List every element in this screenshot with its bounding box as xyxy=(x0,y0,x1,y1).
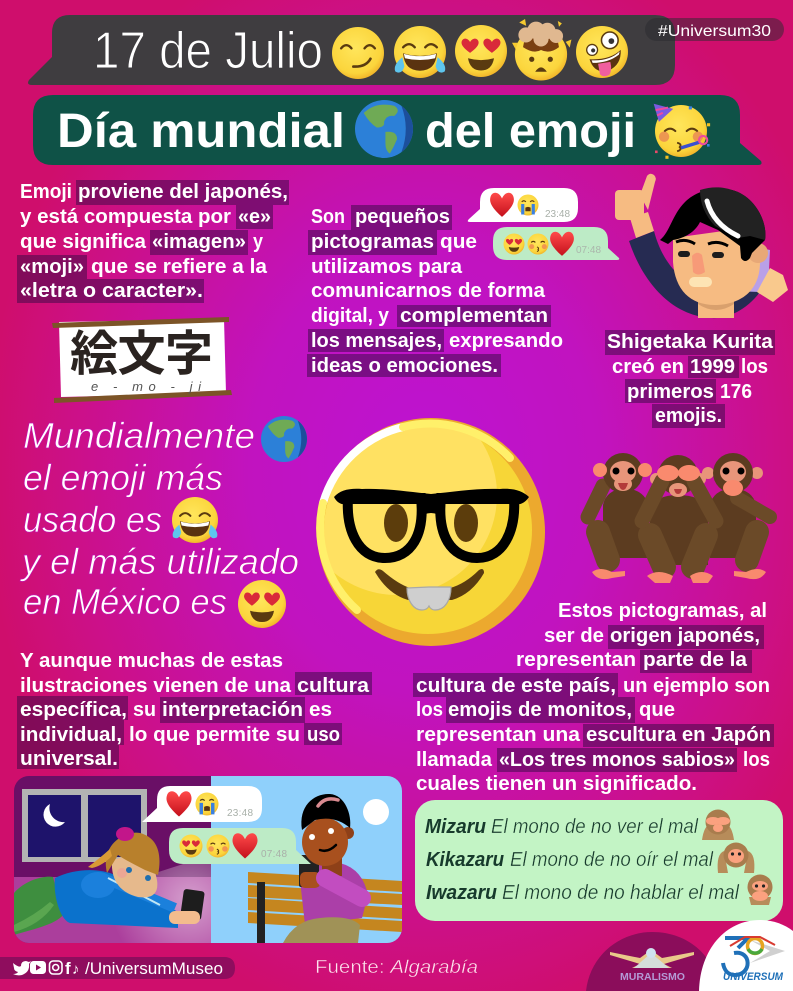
glasses xyxy=(334,489,529,558)
text block: Shigetaka Kurita: Shigetaka Kurita xyxy=(607,330,774,353)
text block: interpretación individual xyxy=(17,649,372,770)
icon: crying emoji xyxy=(518,194,538,216)
timestamp: 23:48 xyxy=(545,209,570,220)
icon: instagram xyxy=(50,961,62,974)
icon: smirking emoji xyxy=(332,27,384,79)
text block: origen japonés: Estos pictogramas, al xyxy=(558,599,767,622)
title bubble: 17 de Julio xyxy=(28,15,675,85)
text block: pictogramas: ideas o emociones. xyxy=(311,354,498,377)
icon: heart eyes emoji xyxy=(455,25,507,77)
text block: origen de la palabra emoji: que se refiere a la xyxy=(91,255,268,278)
kanji sign: 絵文字: e - mo - ji xyxy=(91,379,202,394)
text block: origen japonés: representan una xyxy=(416,723,581,746)
chat bubble: white message xyxy=(468,188,578,222)
left monkey xyxy=(588,453,652,579)
text block: origen de la palabra emoji: proviene del japonés, xyxy=(78,180,288,203)
line: Kikazaru xyxy=(426,842,754,873)
chat bubble: green message xyxy=(493,227,619,260)
social handle: /UniversumMuseo xyxy=(85,959,223,978)
line: Iwazaru: El mono de no hablar el mal xyxy=(502,882,740,904)
day background xyxy=(211,776,402,943)
illustration: Shigetaka Kurita xyxy=(615,174,788,318)
illustration panel: girl and boy chatting xyxy=(14,776,402,943)
icon: youtube xyxy=(30,961,46,974)
icon: laughing emoji xyxy=(172,497,218,543)
text block: interpretación individual: es xyxy=(309,698,332,721)
bench xyxy=(248,872,402,932)
hair xyxy=(660,188,765,261)
text block: interpretación individual: interpretación xyxy=(162,698,303,721)
text block: pictogramas: pictogramas xyxy=(311,230,434,253)
text block: origen japonés: un ejemplo son xyxy=(623,674,770,697)
social media pill xyxy=(0,957,235,979)
text block: emoji más usado: el emoji más xyxy=(23,457,223,498)
hashtag pill: #Universum30 xyxy=(658,23,771,40)
illustration: three wise monkeys xyxy=(588,453,770,583)
text block: interpretación individual: ilustraciones vienen de una xyxy=(20,674,292,697)
night room background xyxy=(14,776,211,943)
main heading part 1: Día mundial xyxy=(57,105,345,158)
text block: interpretación individual: específica, xyxy=(20,698,127,721)
text block: pictogramas: los mensajes, xyxy=(311,329,442,352)
text block: origen de la palabra emoji: «e» xyxy=(238,205,271,228)
text block: origen de la palabra emoji xyxy=(17,180,289,303)
icon: tiktok: ♪ xyxy=(72,961,80,978)
text block: Shigetaka Kurita: primeros xyxy=(627,380,714,403)
face xyxy=(673,228,760,305)
line: Kikazaru: Kikazaru xyxy=(426,849,504,871)
text block: interpretación individual: su xyxy=(133,698,156,721)
text block: pictogramas: comunicarnos de forma xyxy=(311,279,546,302)
text block: origen japonés: cuales tienen un significado. xyxy=(416,772,697,795)
text block: pictogramas: pequeños xyxy=(355,205,450,228)
text block: Shigetaka Kurita: emojis. xyxy=(655,404,722,427)
main heading part 2: del emoji xyxy=(425,105,636,158)
line: Mizaru: El mono de no ver el mal xyxy=(491,816,699,838)
text block: pictogramas: complementan xyxy=(400,304,548,327)
text block: origen japonés: que xyxy=(639,698,675,721)
line: Mizaru: Mizaru xyxy=(425,816,486,838)
text block: Shigetaka Kurita: creó en xyxy=(612,355,684,378)
text block: Shigetaka Kurita: los xyxy=(741,355,768,378)
text block: Shigetaka Kurita: 176 xyxy=(720,380,752,403)
eyes xyxy=(384,504,408,542)
icon: red heart xyxy=(490,193,514,217)
line: Iwazaru xyxy=(426,874,772,905)
text block: origen japonés: cultura de este país, xyxy=(416,674,616,697)
hashtag pill xyxy=(645,18,784,41)
text block: origen japonés: escultura en Japón xyxy=(586,723,771,746)
eyes and brows xyxy=(676,240,728,246)
text block: origen de la palabra emoji: Emoji xyxy=(20,180,72,203)
text block: emoji más usado: en México es xyxy=(23,581,227,622)
central nerd emoji xyxy=(316,418,545,646)
text block: pictogramas: Son xyxy=(311,205,345,228)
kanji sign: 絵文字 xyxy=(52,314,232,403)
text block: origen japonés: los xyxy=(416,698,443,721)
text block: origen de la palabra emoji: y xyxy=(253,230,264,253)
line: Iwazaru: Iwazaru xyxy=(426,882,497,904)
text block: origen de la palabra emoji: «letra o caracter». xyxy=(20,279,203,302)
text block: origen japonés: representan xyxy=(516,648,636,671)
icon: heart eyes emoji xyxy=(504,234,524,254)
logo: Universum 30 xyxy=(699,920,793,991)
text block: origen de la palabra emoji: y está compuesta por xyxy=(20,205,231,228)
panel: tres monos sabios xyxy=(415,800,783,921)
text block: Shigetaka Kurita: 1999 xyxy=(690,355,735,378)
text block: interpretación individual: lo que permite su xyxy=(129,723,300,746)
logo: Universum 30: UNIVERSUM xyxy=(723,971,784,983)
centre monkey xyxy=(642,455,716,583)
icon: heart eyes emoji xyxy=(238,580,286,628)
icon: kissing emoji xyxy=(528,234,548,254)
girl xyxy=(14,827,205,935)
text block: interpretación individual: uso xyxy=(307,723,340,746)
boy xyxy=(283,794,368,943)
text block: origen japonés xyxy=(413,599,774,795)
navy body xyxy=(629,231,760,318)
window with moon xyxy=(22,789,147,862)
icon: laughing emoji xyxy=(394,26,446,78)
right monkey xyxy=(702,453,770,579)
text block: origen japonés: llamada xyxy=(416,748,493,771)
nose and mouth xyxy=(692,253,705,274)
text block: interpretación individual: individual, xyxy=(20,723,122,746)
icon: exploding head emoji xyxy=(512,19,571,80)
fist xyxy=(757,268,788,302)
text block: Shigetaka Kurita xyxy=(605,330,775,428)
text block: origen de la palabra emoji: que significa xyxy=(20,230,147,253)
title bubble: Día mundial del emoji xyxy=(33,95,762,165)
chat bubble: white message: 23:48 xyxy=(227,808,253,819)
icon: twitter xyxy=(13,961,31,975)
text block: emoji más usado: Mundialmente xyxy=(23,415,255,456)
logo: Muralismo: MURALISMO xyxy=(620,971,685,983)
text block: origen japonés: origen japonés, xyxy=(610,624,760,647)
chat bubble: green message: 07:48 xyxy=(261,849,287,860)
icon: zany face emoji xyxy=(576,26,628,78)
raised hand with thumb xyxy=(615,174,656,238)
icon: party face emoji xyxy=(654,104,710,159)
text block: pictogramas: que xyxy=(440,230,477,253)
text block: interpretación individual: universal. xyxy=(20,747,118,770)
text block: emoji más usado xyxy=(19,415,307,628)
icon: globe xyxy=(355,100,413,158)
text block: interpretación individual: Y aunque muchas de estas xyxy=(20,649,283,672)
text block: pictogramas xyxy=(307,205,563,377)
text block: origen japonés: ser de xyxy=(544,624,604,647)
icon: globe xyxy=(261,416,307,462)
icon: facebook: f xyxy=(65,959,71,978)
title date: 17 de Julio xyxy=(93,22,323,80)
kanji sign: 絵文字: 絵文字 xyxy=(70,314,213,384)
text block: origen japonés: parte de la xyxy=(643,648,748,671)
text block: origen japonés: los xyxy=(743,748,770,771)
text block: pictogramas: expresando xyxy=(449,329,563,352)
text block: pictogramas: utilizamos para xyxy=(311,255,463,278)
icon: red heart xyxy=(550,232,574,256)
text block: interpretación individual: cultura xyxy=(297,674,370,697)
text block: origen de la palabra emoji: «imagen» xyxy=(152,230,246,253)
source credit: Fuente: Algarabía xyxy=(315,956,478,977)
logo: Muralismo xyxy=(586,932,719,991)
chat bubble: green message xyxy=(169,828,311,864)
text block: origen de la palabra emoji: «moji» xyxy=(20,255,84,278)
text block: emoji más usado: y el más utilizado xyxy=(19,541,299,582)
timestamp: 07:48 xyxy=(576,245,601,256)
text block: emoji más usado: usado es xyxy=(23,499,162,540)
text block: pictogramas: digital, y xyxy=(311,304,390,327)
line: Mizaru xyxy=(425,810,734,840)
line: Kikazaru: El mono de no oír el mal xyxy=(510,849,714,871)
chat bubble: white message xyxy=(142,786,262,822)
text block: origen japonés: «Los tres monos sabios» xyxy=(499,748,735,771)
text block: origen japonés: emojis de monitos, xyxy=(448,698,632,721)
smile with teeth xyxy=(375,569,484,600)
